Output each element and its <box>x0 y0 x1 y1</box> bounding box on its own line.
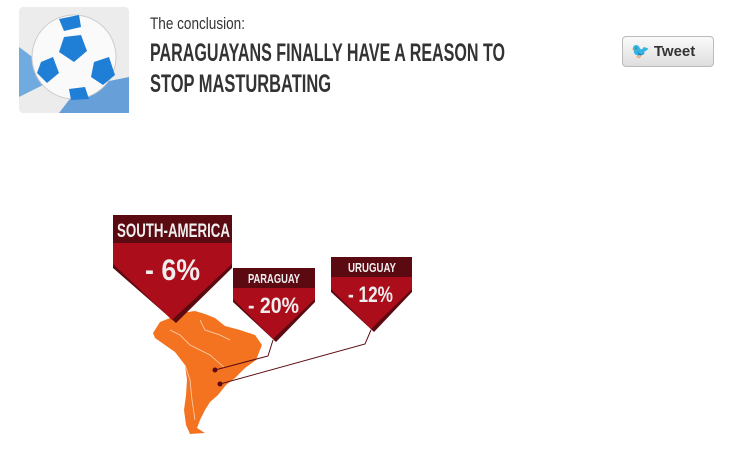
badge: south-america <box>113 215 232 323</box>
badge: paraguay: PARAGUAY <box>248 271 300 286</box>
header text <box>150 14 505 98</box>
button: tweet: 🐦 Tweet <box>631 43 695 60</box>
map: South America <box>153 311 262 434</box>
badge: paraguay <box>233 268 315 342</box>
text: subtitle: The conclusion: <box>150 14 245 33</box>
icon: soccer ball thumbnail <box>19 7 129 113</box>
badge: south-america: SOUTH-AMERICA <box>117 221 230 242</box>
badge: uruguay <box>331 257 412 332</box>
heading: title: STOP MASTURBATING <box>150 70 331 98</box>
button: tweet <box>622 36 714 67</box>
badge: paraguay: - 20% <box>248 293 299 318</box>
badge: uruguay: - 12% <box>348 282 393 307</box>
connector: paraguay <box>212 340 273 372</box>
badge: south-america: - 6% <box>145 254 200 287</box>
badge: uruguay: URUGUAY <box>348 260 396 275</box>
connector: uruguay <box>218 330 371 386</box>
heading: title <box>150 39 505 98</box>
